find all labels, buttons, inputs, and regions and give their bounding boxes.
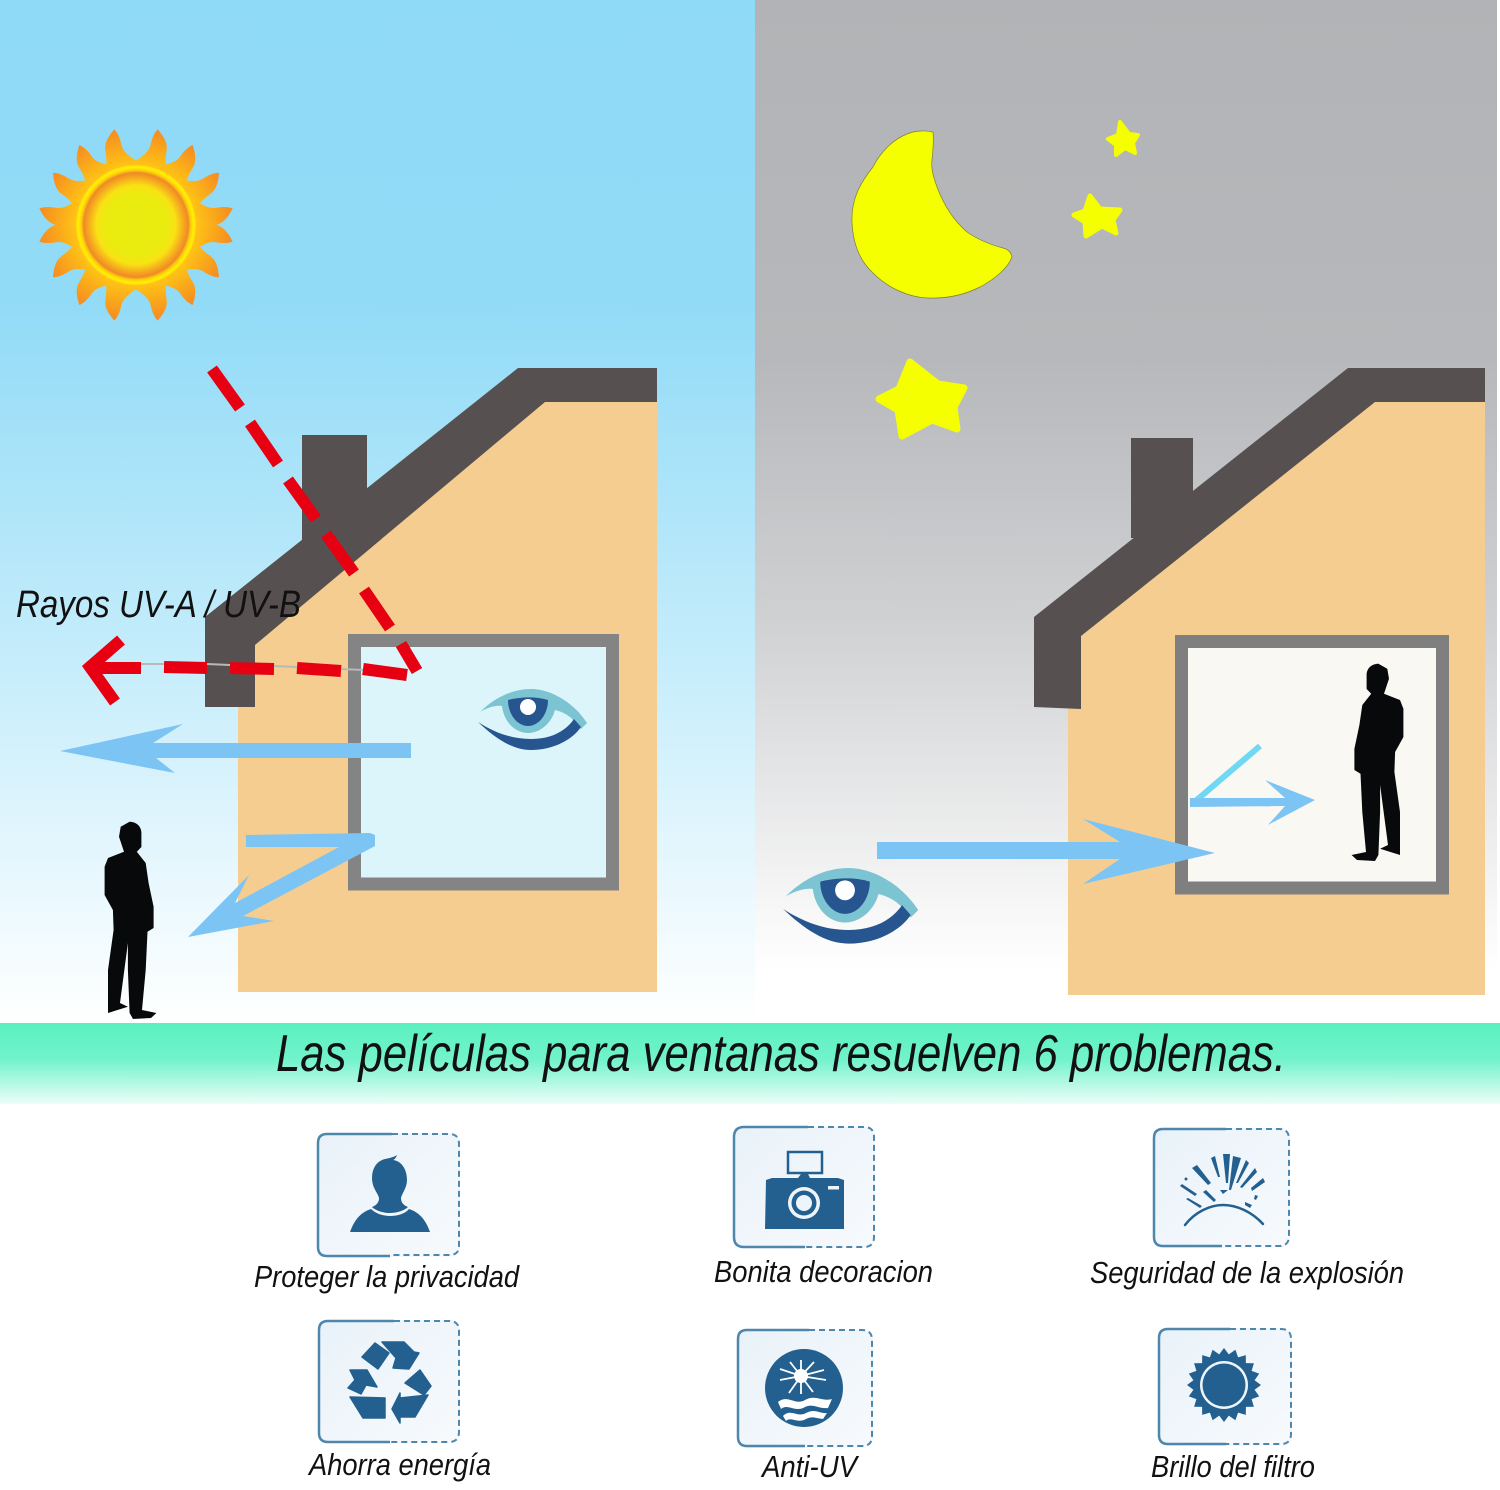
roof [205, 368, 657, 707]
icon: recycling [348, 1342, 431, 1423]
person: outside observer [105, 822, 156, 1019]
lower lid [783, 905, 911, 944]
house: night [1034, 368, 1485, 995]
lower lid [478, 719, 581, 750]
icon: sun [36, 125, 236, 325]
card: explosion safety [1153, 1128, 1290, 1248]
roof [1034, 368, 1485, 709]
icon: sun over water [765, 1349, 843, 1427]
chimney [1131, 438, 1193, 538]
house wall [238, 390, 657, 992]
heading band [0, 1023, 1500, 1104]
label: energy saving: Ahorra energía [307, 1447, 491, 1482]
card: privacy [317, 1133, 460, 1257]
icon: small star [1108, 122, 1138, 155]
card background [1158, 1328, 1292, 1446]
icon: shattering glass [1180, 1154, 1265, 1225]
panel: night scene sky [755, 0, 1497, 1023]
arrow: reflected light toward person [188, 833, 375, 937]
house wall [1068, 390, 1485, 995]
icon: eye outside house [783, 868, 918, 944]
icon: eye inside window [478, 689, 587, 750]
label: privacy: Proteger la privacidad [254, 1259, 521, 1294]
chimney [302, 435, 367, 545]
label: anti UV: Anti-UV [760, 1449, 860, 1484]
pupil highlight [835, 880, 855, 900]
pupil [820, 878, 870, 914]
window with film [354, 640, 612, 884]
pupil highlight [520, 699, 536, 715]
card: decoration [733, 1127, 875, 1248]
icon: person bust [350, 1155, 430, 1232]
card background [737, 1330, 873, 1448]
thin grey ray line [141, 664, 363, 670]
window [1182, 642, 1442, 888]
card background [318, 1320, 460, 1443]
label: decoration: Bonita decoracion [714, 1254, 933, 1289]
card: glare filter [1158, 1328, 1292, 1446]
label: glare filter: Brillo del filtro [1151, 1449, 1315, 1484]
label: UV rays: Rayos UV-A / UV-B [16, 584, 301, 626]
label: explosion safety: Seguridad de la explosión [1090, 1255, 1404, 1290]
card background [733, 1127, 875, 1248]
icon: camera [765, 1152, 844, 1229]
arrow: view toward person [1190, 780, 1315, 825]
icon: bright sun gear [1187, 1348, 1261, 1422]
card: anti UV [737, 1330, 873, 1448]
icon: large star [879, 362, 964, 436]
arrow: UV rays reflected (red dashed) [90, 369, 417, 702]
pupil [508, 697, 548, 726]
icon: crescent moon [852, 131, 1012, 298]
eye top lid and iris [480, 689, 587, 733]
title: Las películas para ventanas resuelven 6 problemas. [276, 1025, 1286, 1083]
panel: day scene sky [0, 0, 755, 1023]
eye top lid and iris [786, 868, 918, 923]
arrow: view blocked outward [60, 724, 411, 773]
icon: medium star [1074, 196, 1120, 236]
house: day [205, 368, 657, 992]
card background [317, 1133, 460, 1257]
arrow: view into house [877, 819, 1215, 884]
card: energy saving [318, 1320, 460, 1443]
arrow: reflected line in window [1192, 746, 1260, 804]
person: inside the house [1352, 664, 1403, 861]
card background [1153, 1128, 1290, 1248]
